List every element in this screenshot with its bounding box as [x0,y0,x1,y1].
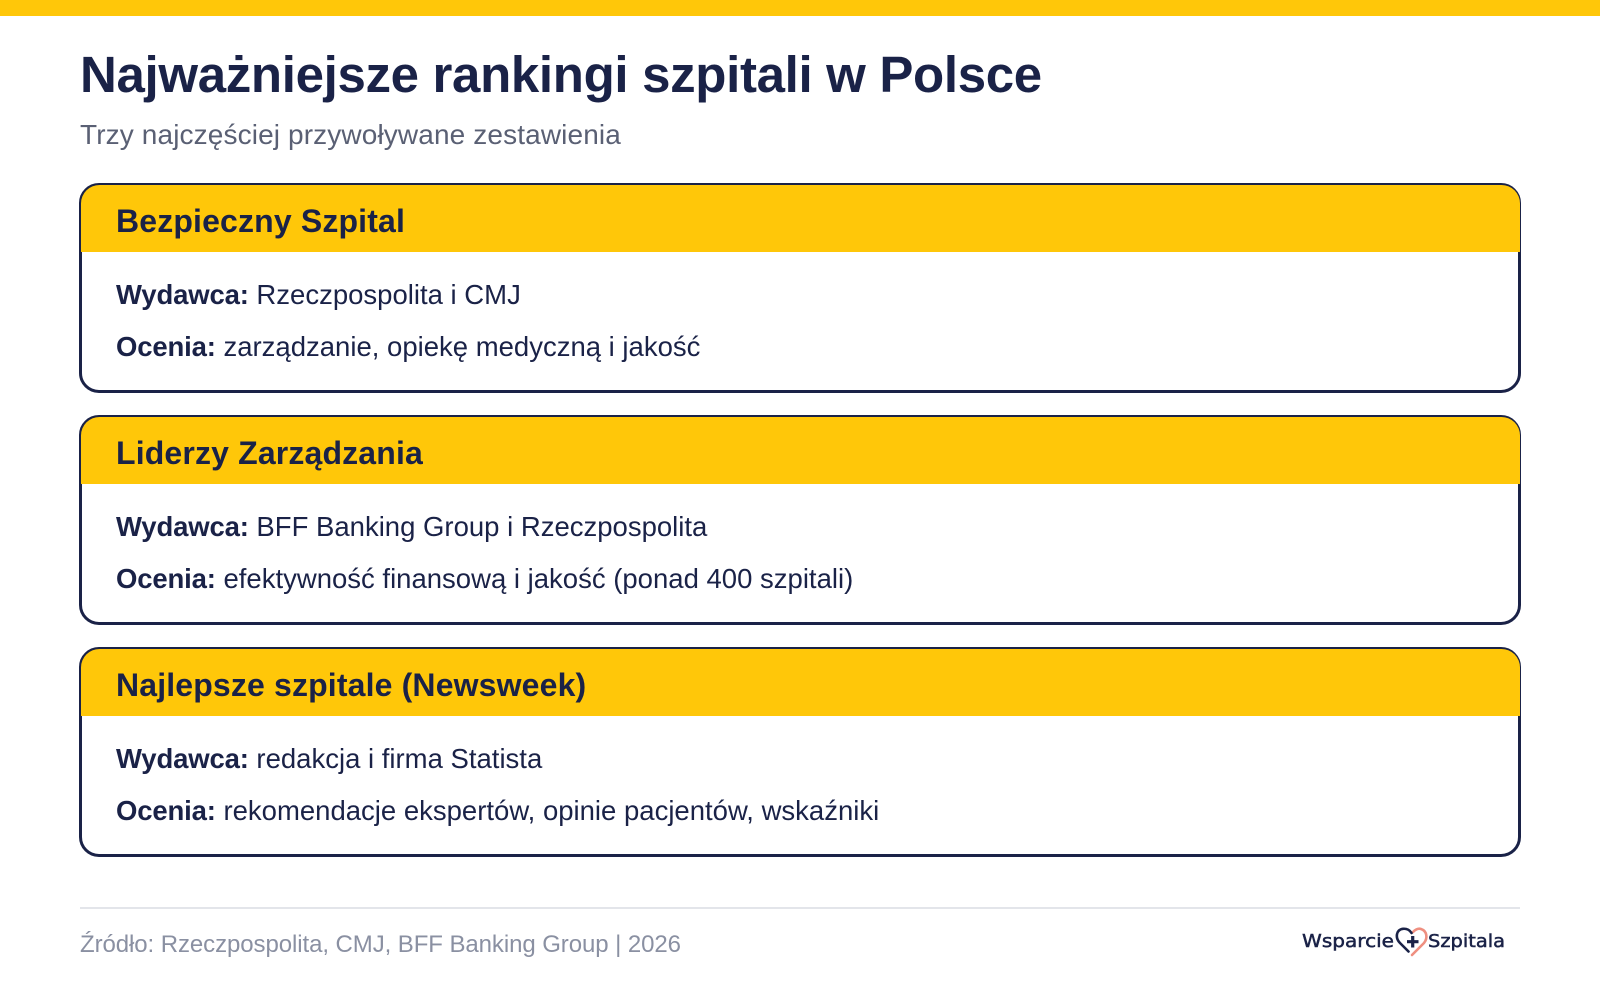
criteria line: Ocenia: efektywność finansową i jakość (ponad 400 szpitali) [116,563,853,594]
publisher line: Wydawca: BFF Banking Group i Rzeczpospolita [116,511,707,542]
panel: Liderzy Zarządzania [79,415,1521,625]
panel heading: Liderzy Zarządzania [116,434,423,470]
icon: heart with cross [1397,929,1426,955]
panel heading [80,416,1520,484]
panel heading [80,184,1520,252]
logo: Wsparcie Szpitala: Szpitala [1428,931,1505,952]
logo: Wsparcie Szpitala [1302,927,1505,956]
panel heading: Najlepsze szpitale (Newsweek) [116,666,586,702]
publisher line: Wydawca: Rzeczpospolita i CMJ [116,279,521,310]
logo: Wsparcie Szpitala: Wsparcie [1302,931,1394,952]
top accent bar [0,0,1600,16]
criteria line: Ocenia: rekomendacje ekspertów, opinie pacjentów, wskaźniki [116,795,879,826]
panel heading: Bezpieczny Szpital [116,202,405,238]
criteria line: Ocenia: zarządzanie, opiekę medyczną i jakość [116,331,700,362]
panel heading [80,648,1520,716]
panel: Bezpieczny Szpital [79,183,1521,393]
source note: Źródło: Rzeczpospolita, CMJ, BFF Banking Group | 2026 [80,931,681,958]
title: Najważniejsze rankingi szpitali w Polsce [80,46,1042,103]
publisher line: Wydawca: redakcja i firma Statista [116,743,542,774]
subtitle: Trzy najczęściej przywoływane zestawienia [80,119,621,150]
panel: Najlepsze szpitale (Newsweek) [79,647,1521,857]
